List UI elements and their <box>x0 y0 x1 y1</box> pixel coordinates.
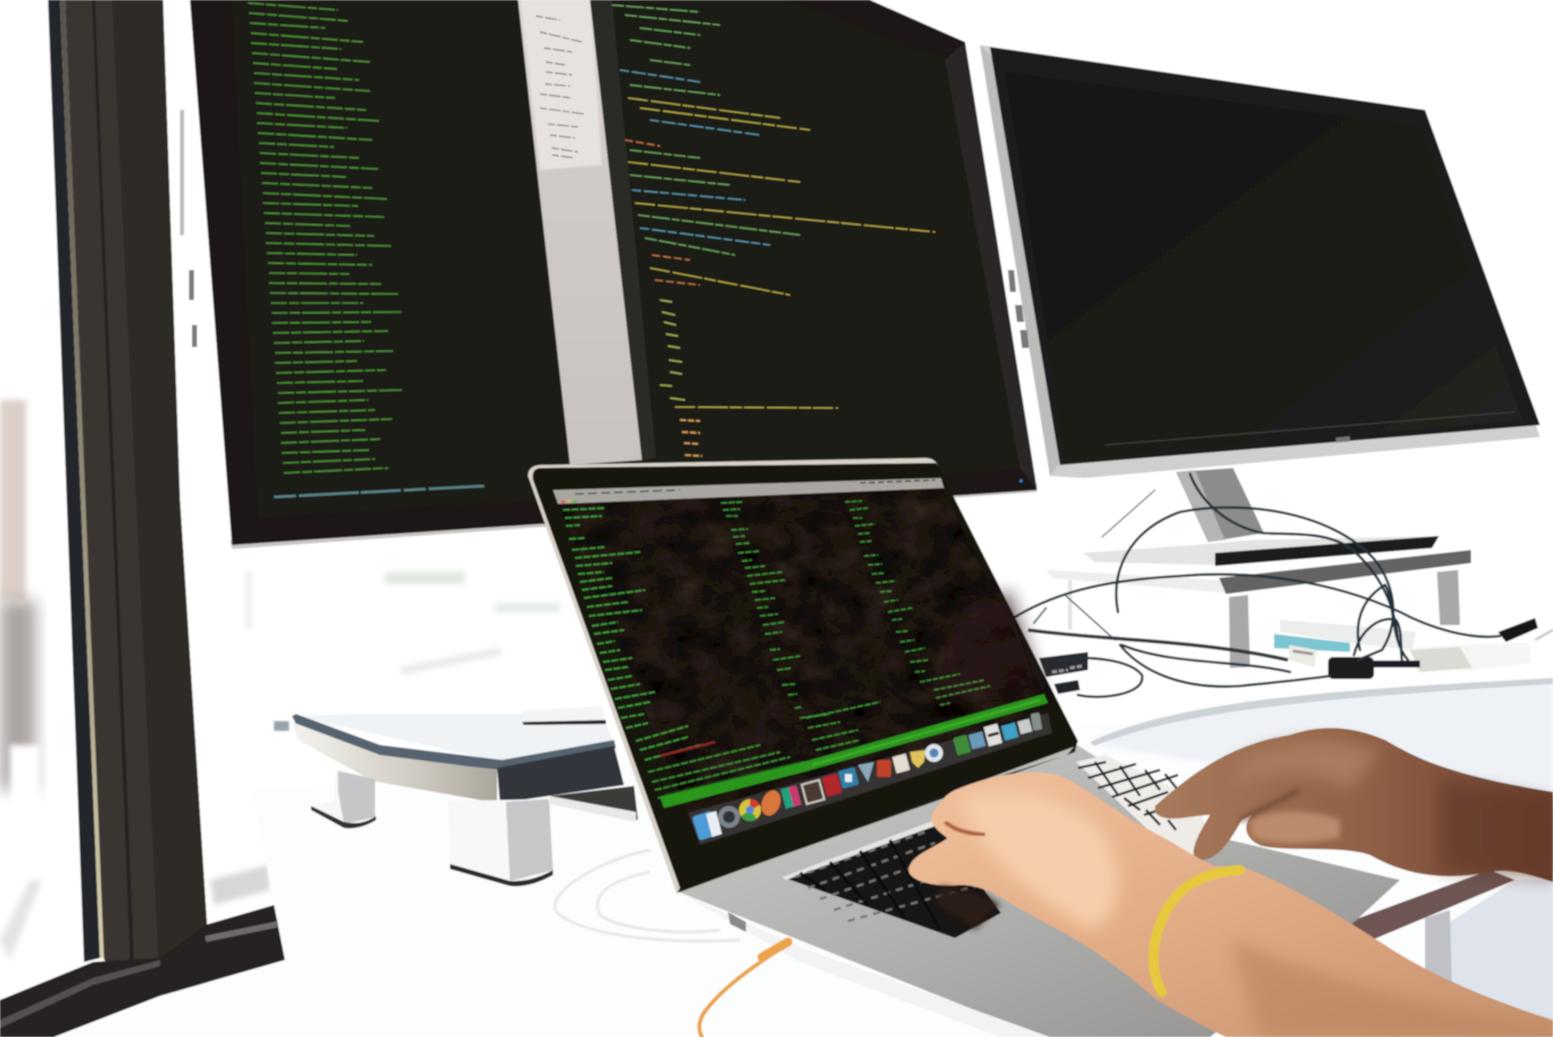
tmux green bar <box>660 694 1048 808</box>
USB hub <box>1039 652 1088 677</box>
screen <box>232 0 1020 518</box>
left monitor riser <box>274 706 638 886</box>
finger crease <box>945 822 985 835</box>
arm shadow <box>1230 940 1553 1037</box>
bezel <box>990 47 1540 465</box>
stand neck <box>1176 468 1264 542</box>
far hand <box>1155 728 1553 882</box>
side ports <box>728 912 746 932</box>
silver lower trim <box>230 484 1037 549</box>
right keyboard keys <box>1078 762 1178 830</box>
screen <box>1005 72 1522 460</box>
blown-out reflections under main monitor <box>246 570 560 674</box>
riser dark front <box>497 746 624 803</box>
left pane code listing <box>248 3 402 473</box>
laptop stand underside <box>550 786 638 820</box>
lid silver rim <box>528 458 938 893</box>
peripherals on the right <box>1015 474 1553 697</box>
silver base <box>679 745 1400 1037</box>
lid outer <box>528 458 1078 893</box>
riser silver front <box>292 722 497 803</box>
desk leg post <box>1425 910 1452 985</box>
desk surface <box>54 690 1553 1037</box>
screen wallpaper <box>558 486 1050 840</box>
cables <box>1015 474 1500 697</box>
window frame <box>0 0 285 1037</box>
main monitor <box>190 0 1037 549</box>
label tag <box>1289 645 1317 667</box>
silver chassis <box>980 45 1540 478</box>
terminal column three <box>845 501 990 705</box>
sidebar top file list <box>521 0 602 170</box>
right pane code <box>612 5 935 456</box>
power LED <box>1019 479 1023 483</box>
terminal column one <box>563 508 805 798</box>
hand highlights <box>1250 812 1340 843</box>
leg one <box>311 769 375 826</box>
leg two <box>448 799 553 883</box>
gutter <box>590 0 656 460</box>
bracelet <box>1153 870 1240 992</box>
wallpaper texture <box>558 486 1050 840</box>
sidebar <box>518 0 642 465</box>
menu bar <box>553 478 944 504</box>
hinge <box>734 743 1077 868</box>
side ports <box>1008 270 1029 348</box>
shadow under hand on keyboard <box>935 885 1000 930</box>
near hand and arm <box>909 772 1553 1037</box>
dock icons <box>692 810 720 841</box>
desk shading on right <box>1090 682 1553 880</box>
bottom screen line <box>1105 412 1515 445</box>
stand base <box>1083 536 1439 565</box>
back of hand highlight <box>960 792 1118 930</box>
laptop <box>528 458 1400 1037</box>
right monitor <box>980 45 1540 668</box>
white front edge <box>679 892 1050 1037</box>
blue book <box>1274 634 1350 652</box>
riser blue edge <box>292 714 616 770</box>
bezel <box>190 0 1037 545</box>
wallpaper reflection <box>935 590 1042 700</box>
lower right floor <box>1445 880 1553 1020</box>
white adapter <box>1416 643 1531 670</box>
window: outside view <box>0 110 270 960</box>
laptop stand bar <box>1340 870 1515 945</box>
terminal column two <box>721 502 880 750</box>
white cable coil <box>555 850 740 941</box>
plug <box>1498 618 1538 642</box>
dock <box>688 712 1052 845</box>
riser top <box>294 714 614 762</box>
monitor riser <box>1046 570 1226 593</box>
orange cable <box>699 942 790 1037</box>
left pane status line <box>274 486 484 497</box>
slab on riser <box>522 706 606 722</box>
ferrite <box>1328 657 1374 679</box>
badge <box>1336 436 1350 443</box>
dark keyboard <box>782 820 1001 938</box>
white desk cable <box>1090 678 1553 746</box>
